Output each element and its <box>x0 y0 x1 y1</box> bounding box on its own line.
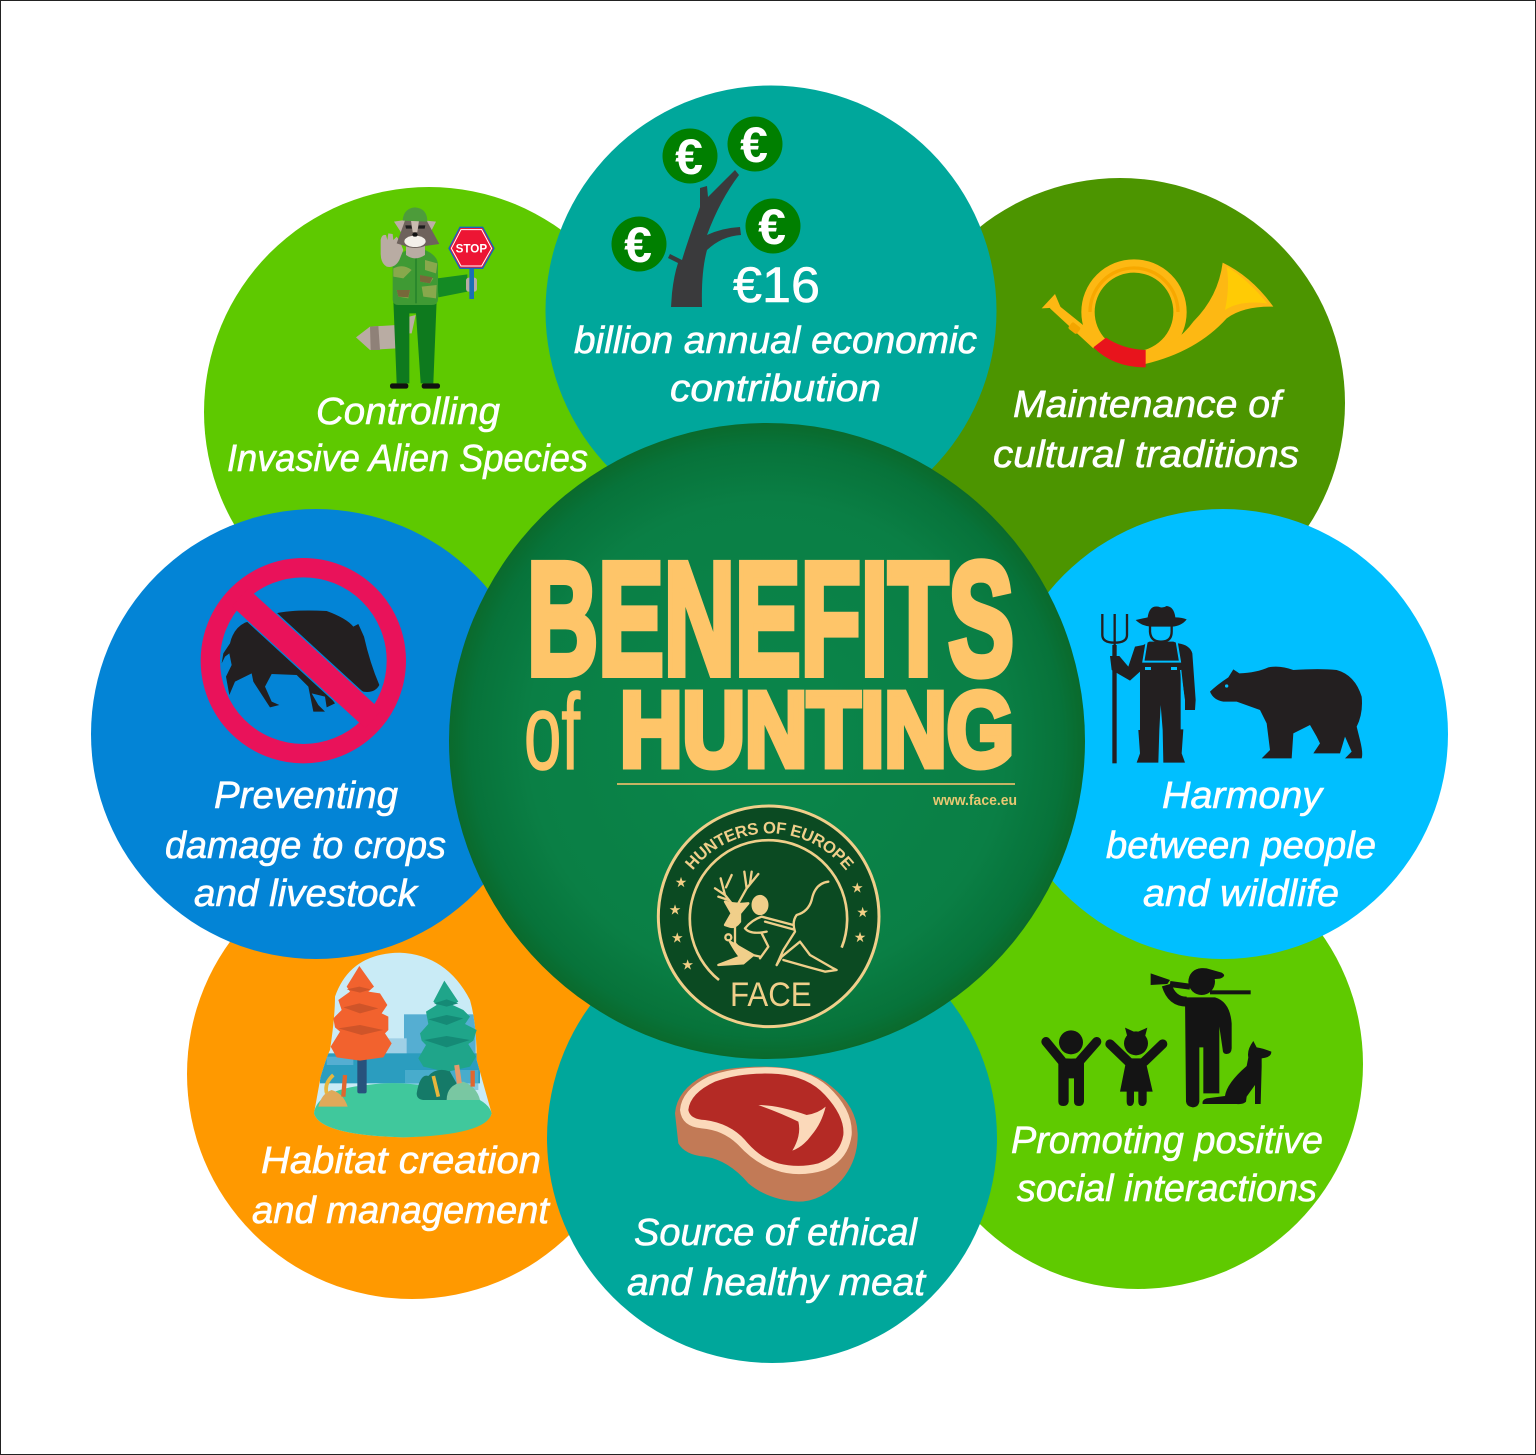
logo: FACE hunters of Europe: ★ <box>669 903 681 919</box>
text: economic contribution: billion annual economic <box>574 320 977 362</box>
title: benefits of hunting: HUNTING <box>620 671 1014 789</box>
text: harmony between people and wildlife: between people <box>1106 825 1376 867</box>
panel: harmony between people and wildlife <box>998 509 1448 959</box>
logo: FACE hunters of Europe: ★ <box>854 930 866 946</box>
text: promoting positive social interactions: social interactions <box>1017 1168 1317 1210</box>
panel: preventing damage to crops and livestock <box>91 509 541 959</box>
text: promoting positive social interactions <box>1011 1120 1323 1210</box>
logo: FACE hunters of Europe <box>656 804 880 1028</box>
text: ethical and healthy meat: and healthy meat <box>627 1262 926 1304</box>
panel: habitat creation and management <box>187 884 590 1299</box>
text: economic contribution <box>574 257 977 410</box>
text: maintenance of cultural traditions <box>993 384 1299 476</box>
icon: forest habitat scene <box>314 952 492 1138</box>
icon: steak <box>675 1067 858 1202</box>
text: preventing damage to crops and livestock: damage to crops <box>165 825 446 867</box>
icon: hunter with children and dog <box>1046 968 1271 1107</box>
icon: euro money tree: € <box>740 117 768 173</box>
icon: hunting horn <box>1042 263 1273 367</box>
title: benefits of hunting: BENEFITS <box>527 529 1014 708</box>
panel: promoting positive social interactions <box>913 839 1363 1289</box>
panel: maintenance of cultural traditions <box>895 178 1345 628</box>
text: harmony between people and wildlife: and wildlife <box>1143 873 1339 915</box>
text: preventing damage to crops and livestock: and livestock <box>194 873 419 915</box>
text: economic contribution: contribution <box>670 368 881 410</box>
panel: controlling invasive alien species <box>204 187 654 637</box>
text: maintenance of cultural traditions: Maintenance of <box>1013 384 1285 426</box>
title: benefits of hunting: of <box>524 671 581 792</box>
logo: FACE hunters of Europe: ★ <box>856 905 869 921</box>
icon: euro money tree <box>612 116 800 307</box>
text: preventing damage to crops and livestock <box>165 775 446 915</box>
icon: prohibited wild boar <box>210 568 396 754</box>
text: promoting positive social interactions: Promoting positive <box>1011 1120 1323 1162</box>
panel: central title circle <box>449 423 1085 1059</box>
panel: economic contribution <box>546 86 996 536</box>
panel: ethical and healthy meat <box>547 913 997 1363</box>
icon: euro money tree: € <box>758 199 786 255</box>
text: controlling invasive alien species: Invasive Alien Species <box>227 438 588 480</box>
text: maintenance of cultural traditions: cultural traditions <box>993 434 1299 476</box>
text: harmony between people and wildlife <box>1106 775 1376 915</box>
text: ethical and healthy meat: Source of ethical <box>634 1212 919 1254</box>
icon: raccoon soldier with stop sign <box>356 207 494 389</box>
icon: euro money tree: € <box>624 217 652 273</box>
text: controlling invasive alien species <box>227 391 588 480</box>
text: habitat creation and management: Habitat creation <box>261 1140 541 1182</box>
title: benefits of hunting <box>524 529 1014 792</box>
icon: raccoon soldier with stop sign: STOP <box>456 242 487 255</box>
logo: FACE hunters of Europe: ★ <box>851 881 864 897</box>
text: website: www.face.eu <box>932 792 1017 809</box>
logo: FACE hunters of Europe: ★ <box>675 875 687 891</box>
logo: FACE hunters of Europe: ★ <box>671 931 684 947</box>
logo: FACE hunters of Europe: ★ <box>681 957 694 973</box>
logo: FACE hunters of Europe: FACE <box>730 976 812 1014</box>
icon: euro money tree: € <box>675 129 703 185</box>
icon: deer and huntress line art <box>715 872 837 972</box>
text: harmony between people and wildlife: Harmony <box>1162 775 1324 817</box>
text: ethical and healthy meat <box>627 1212 926 1304</box>
text: habitat creation and management <box>252 1140 550 1232</box>
text: habitat creation and management: and management <box>252 1190 550 1232</box>
text: preventing damage to crops and livestock: Preventing <box>214 775 398 817</box>
icon: farmer with pitchfork and bear <box>1102 606 1362 763</box>
text: economic contribution: €16 <box>733 257 820 313</box>
text: controlling invasive alien species: Controlling <box>316 391 500 433</box>
logo: FACE hunters of Europe: HUNTERS OF EUROPE <box>684 822 854 870</box>
